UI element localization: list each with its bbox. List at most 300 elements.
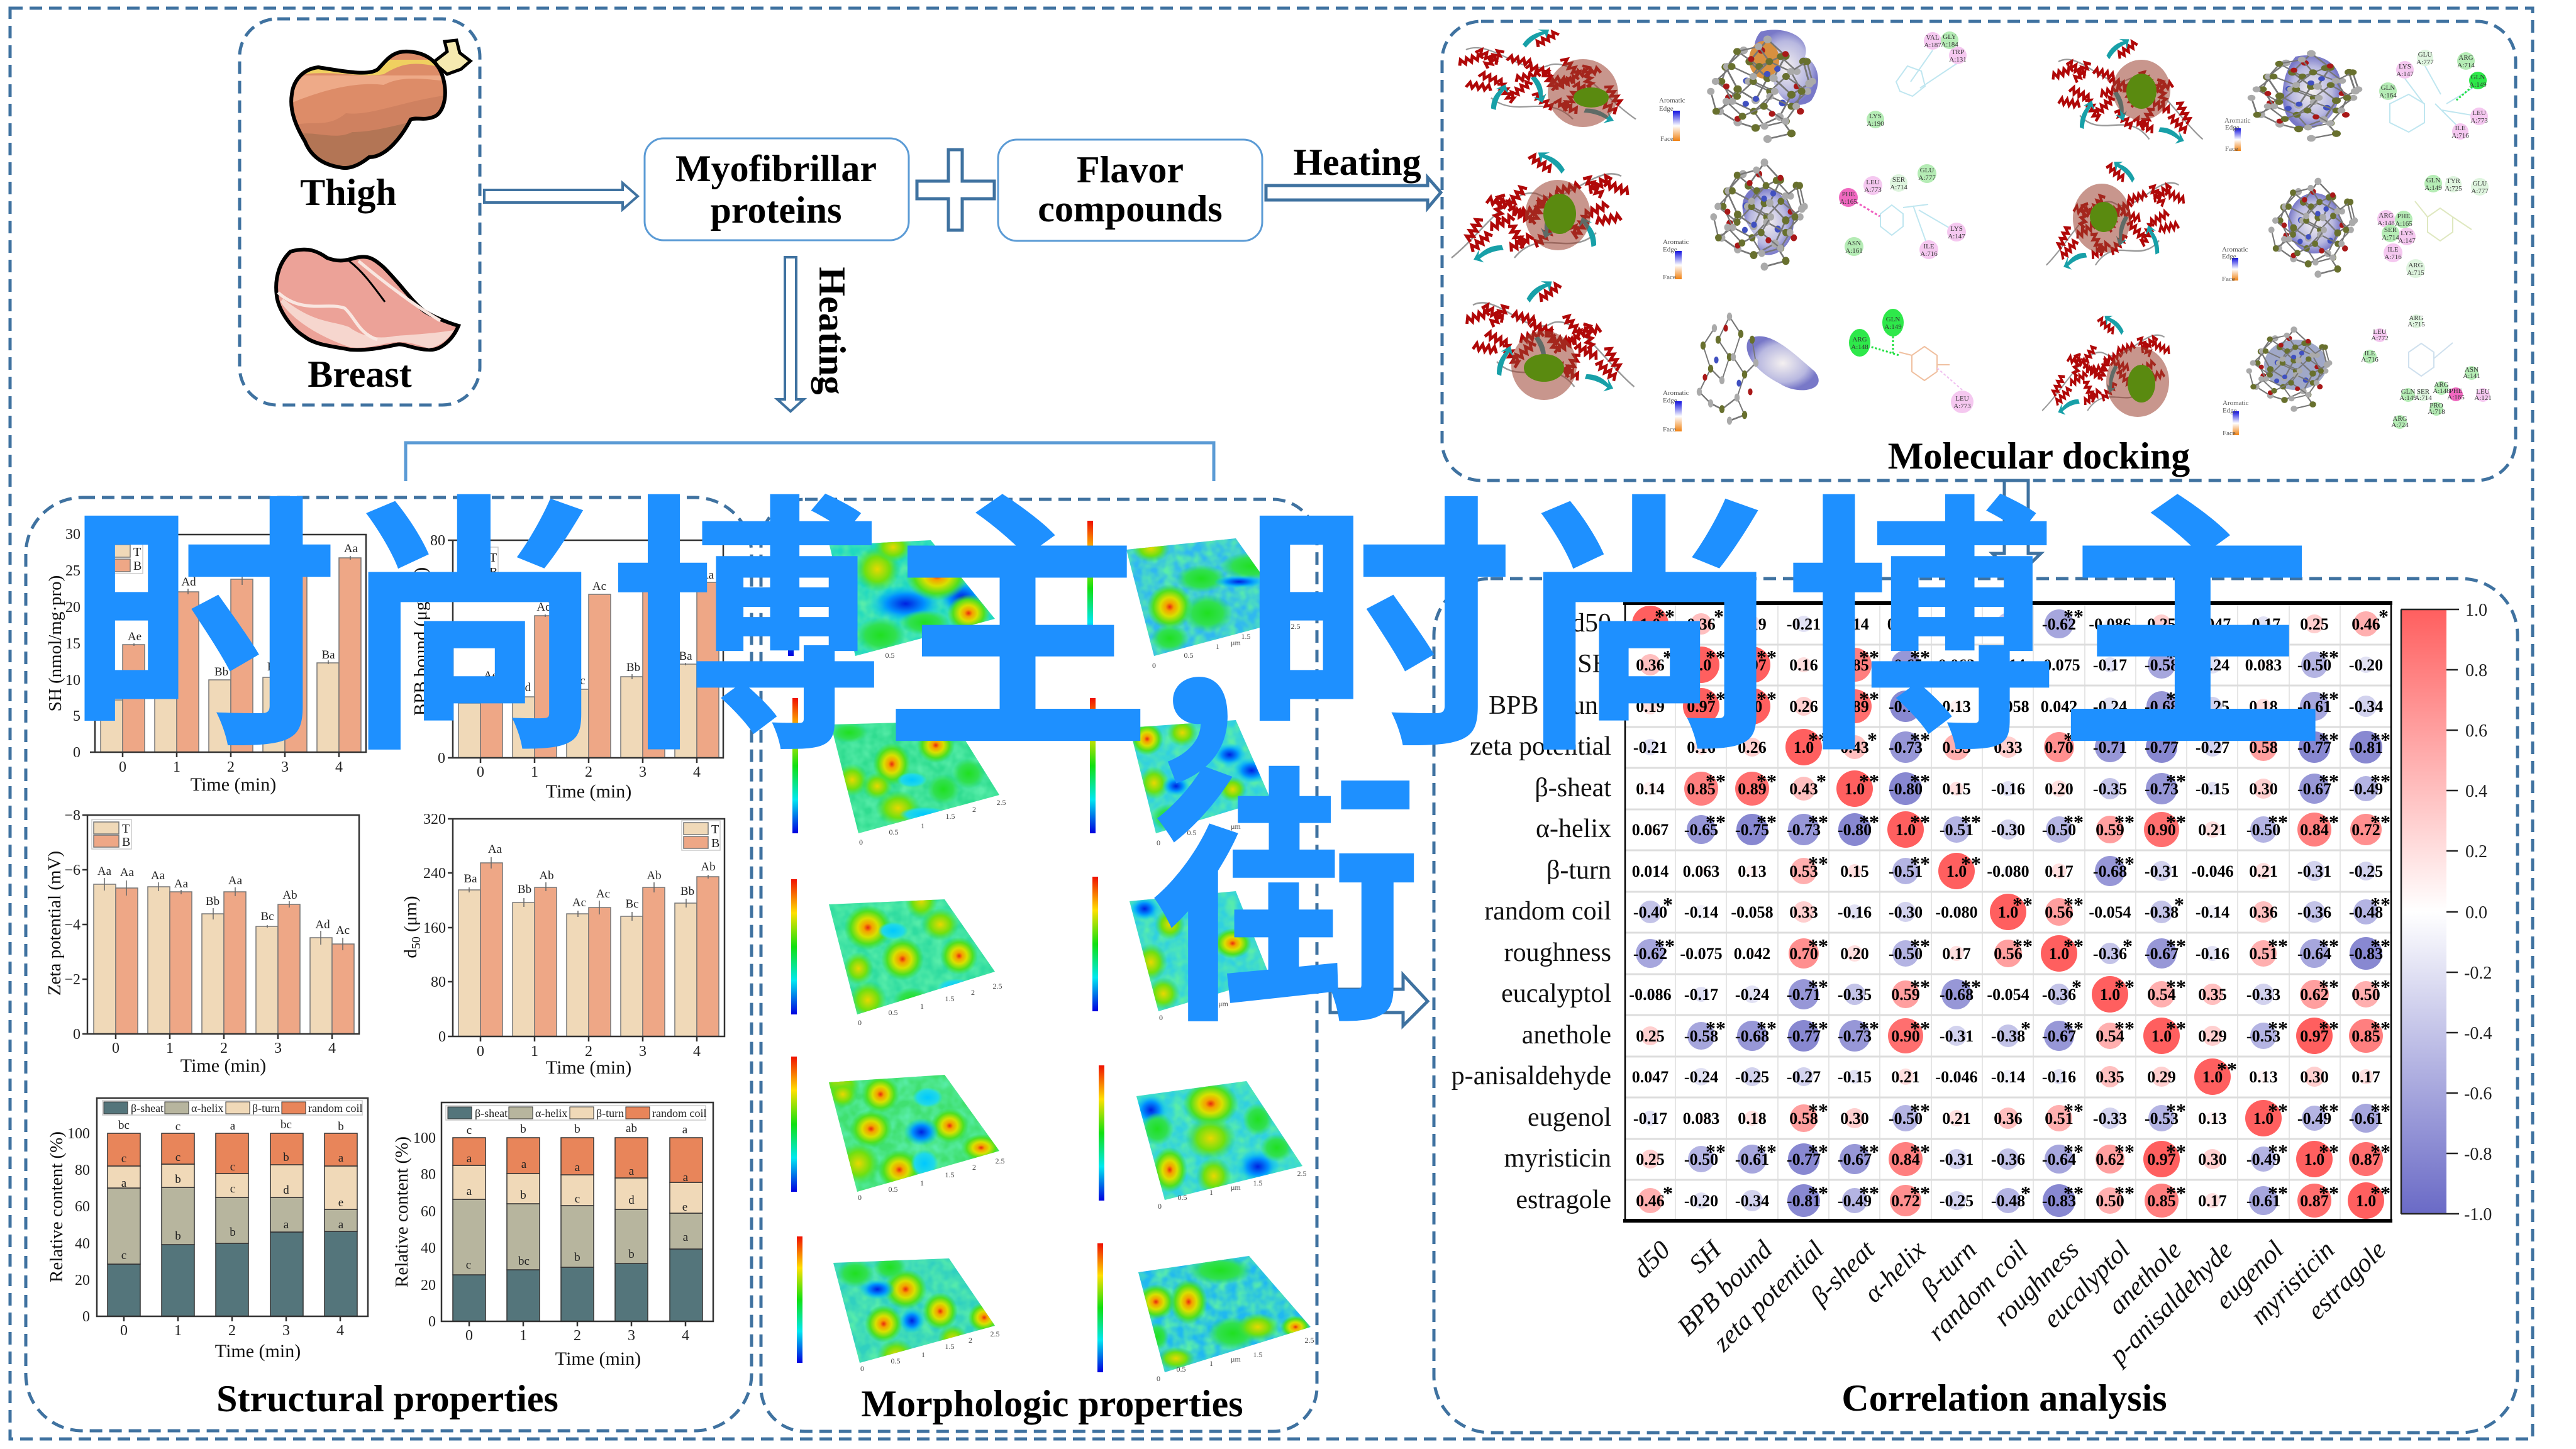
row: anethole: 1.0 <box>2151 1027 2172 1045</box>
row: beta-sheat: 0.20 <box>2045 780 2074 798</box>
AFM surface row 5 left: 2.5 <box>990 1330 1000 1338</box>
chart: d50: 0 <box>438 1029 446 1045</box>
row: eugenol: ** <box>2319 1099 2339 1122</box>
chart: secondary structure breast: 0 <box>428 1314 436 1330</box>
chart: secondary structure thigh: b <box>230 1226 236 1239</box>
2D interaction diagrams: A:716 <box>2361 356 2379 364</box>
row: SH: ** <box>1706 646 1726 669</box>
chart: d50: Bb <box>680 885 694 898</box>
AFM surface row 1 left <box>830 540 995 658</box>
row: eucalyptol: -0.086 <box>1629 985 1672 1004</box>
2D interaction diagrams: A:714 <box>2414 394 2432 402</box>
row: SH: * <box>1663 646 1673 669</box>
chart: secondary structure breast: c <box>466 1258 471 1272</box>
2D interaction diagrams: A:147 <box>1948 233 1965 240</box>
2D interaction diagrams: GLN <box>2471 74 2485 81</box>
row: myristicin: -0.64 <box>2042 1150 2076 1169</box>
row: eugenol: ** <box>2370 1099 2390 1122</box>
row: anethole: ** <box>2319 1017 2339 1040</box>
row: beta-sheat: ** <box>1757 770 1777 792</box>
AFM surface row 2 left: 1 <box>921 821 924 830</box>
AFM surface row 1 right: 0.5 <box>1184 651 1194 660</box>
chart: secondary structure breast: 80 <box>421 1167 436 1183</box>
row: eugenol: ** <box>2166 1099 2186 1122</box>
row: p-anisaldehyde: -0.15 <box>1838 1068 1872 1086</box>
chart: secondary structure thigh: 40 <box>75 1236 90 1252</box>
row: roughness: ** <box>2268 935 2288 957</box>
row: d50: 0.46 <box>2351 615 2380 633</box>
chart: secondary structure thigh: e <box>338 1196 343 1209</box>
row: myristicin: ** <box>1808 1140 1828 1163</box>
chart: BPB bound: 2 <box>585 764 592 780</box>
row: zeta potential: -0.81 <box>2349 738 2383 757</box>
aromatic legends: Edge <box>2222 253 2236 260</box>
AFM surface row 5 left <box>833 1255 1001 1373</box>
row: alpha-helix: -0.65 <box>1684 821 1718 839</box>
row: anethole: 0.97 <box>2300 1027 2329 1045</box>
row: random coil: -0.38 <box>2145 903 2179 921</box>
row: myristicin: 0.87 <box>2351 1150 2380 1169</box>
chart: SH: Bd <box>105 682 119 695</box>
chart: d50: 2 <box>585 1043 592 1060</box>
row: zeta potential: 0.43 <box>1840 738 1869 757</box>
row: beta-turn: -0.31 <box>2297 862 2331 880</box>
chart: secondary structure breast: 20 <box>421 1277 436 1294</box>
row: SH: 0.97 <box>1738 656 1767 674</box>
row: beta-sheat <box>1636 770 2390 807</box>
row: roughness: 0.70 <box>1789 945 1818 963</box>
chart: d50 <box>401 811 724 1078</box>
row: estragole: 0.85 <box>2147 1192 2176 1210</box>
chart: zeta potential: −2 <box>64 972 80 988</box>
2D interaction diagrams: ILE <box>2364 350 2375 357</box>
row: roughness: ** <box>2063 935 2084 957</box>
2D interaction diagrams: GLU <box>2473 180 2487 187</box>
row: myristicin: -0.50 <box>1684 1150 1718 1169</box>
row: eucalyptol: 0.59 <box>1891 985 1920 1004</box>
row: anethole: -0.53 <box>2246 1027 2280 1045</box>
chart: secondary structure breast: b <box>628 1248 635 1261</box>
chart: secondary structure breast: b <box>520 1123 526 1136</box>
arrow with heating label to molecular docking: Heating <box>1293 142 1421 183</box>
row: beta-sheat: 0.30 <box>2249 780 2278 798</box>
row: estragole: -0.83 <box>2042 1192 2076 1210</box>
chart: zeta potential: 2 <box>220 1040 228 1057</box>
row: estragole: 0.17 <box>2198 1192 2227 1210</box>
chart: zeta potential: Time (min) <box>180 1055 266 1076</box>
row: SH: 1.0 <box>1691 656 1711 674</box>
row: anethole: 0.54 <box>2096 1027 2124 1045</box>
row: myristicin: ** <box>2268 1140 2288 1163</box>
row: myristicin: -0.36 <box>1991 1150 2025 1169</box>
row: p-anisaldehyde: 1.0 <box>2202 1068 2223 1086</box>
2D interaction diagrams: PRO <box>2429 402 2443 409</box>
chart: secondary structure breast: 3 <box>628 1328 635 1344</box>
chart: zeta potential: Aa <box>97 865 112 878</box>
arrow: morphology to correlation <box>1330 975 1428 1026</box>
row: eugenol: ** <box>2268 1099 2288 1122</box>
row: estragole: * <box>1663 1182 1673 1204</box>
chart: secondary structure thigh: bc <box>118 1119 130 1132</box>
chart: SH: Bb <box>214 665 228 679</box>
2D interaction diagrams: A:772 <box>2371 335 2389 342</box>
AFM surface row 4 left: 0.5 <box>888 1185 898 1194</box>
chart: SH: Aa <box>344 542 358 555</box>
chart: secondary structure breast: 0 <box>465 1328 473 1344</box>
AFM surface row 5 right: 0 <box>1157 1374 1160 1383</box>
chart: d50: Aa <box>488 843 502 856</box>
row: eucalyptol: -0.35 <box>1838 985 1872 1004</box>
row: random coil: -0.080 <box>1935 903 1978 921</box>
row: roughness: -0.36 <box>2093 945 2127 963</box>
row: eugenol: -0.61 <box>2349 1109 2383 1128</box>
row: beta-sheat: ** <box>1706 770 1726 792</box>
2D interaction diagrams: GLU <box>1920 167 1934 174</box>
colour scale: 0.2 <box>2465 842 2487 862</box>
colour scale <box>2401 601 2492 1224</box>
row: p-anisaldehyde: 0.21 <box>1891 1068 1920 1086</box>
row: BPB bound: -0.25 <box>2196 697 2229 716</box>
row: eucalyptol: ** <box>2166 975 2186 998</box>
row: d50: 0.067 <box>1887 615 1924 633</box>
chart: secondary structure breast: a <box>629 1165 635 1178</box>
arrow with heating label to molecular docking <box>1266 142 1441 208</box>
overlay: large blue watermark text: 街 <box>1151 682 1423 1075</box>
2D interaction diagrams: A:773 <box>1864 186 1882 194</box>
column labels: eugenol <box>2210 1236 2289 1315</box>
row: d50: 0.014 <box>1938 615 1975 633</box>
label: Correlation analysis: Correlation analysis <box>1841 1377 2167 1419</box>
row: p-anisaldehyde: 0.30 <box>2300 1068 2329 1086</box>
2D interaction diagrams: A:716 <box>1920 250 1938 258</box>
chart: d50: 320 <box>423 811 446 828</box>
row: anethole: ** <box>2114 1017 2135 1040</box>
row: zeta potential: 0.26 <box>1738 738 1767 757</box>
row: zeta potential: * <box>1867 728 1877 751</box>
AFM surface row 4 right <box>1133 1081 1307 1211</box>
row: alpha-helix: -0.50 <box>2042 821 2076 839</box>
2D interaction diagrams: SER <box>2384 226 2397 234</box>
2D interaction diagrams: LYS <box>2399 63 2411 70</box>
chart: zeta potential: T <box>122 822 130 836</box>
row: d50: * <box>1714 605 1724 628</box>
chart: zeta potential: 0 <box>112 1040 119 1057</box>
aromatic legends: Edge <box>1659 105 1674 113</box>
row: random coil: 0.56 <box>2045 903 2074 921</box>
row: roughness: 0.51 <box>2249 945 2278 963</box>
row: d50: -0.62 <box>2042 615 2076 633</box>
chart: secondary structure thigh: c <box>175 1120 180 1133</box>
row: zeta potential: -0.77 <box>2145 738 2179 757</box>
chart: secondary structure thigh: c <box>230 1182 235 1196</box>
row: zeta potential: 0.58 <box>2249 738 2278 757</box>
AFM surface row 5 right: μm <box>1231 1355 1241 1363</box>
row: p-anisaldehyde: 0.35 <box>2096 1068 2124 1086</box>
aromatic legends: Aromatic <box>2222 246 2248 253</box>
row labels <box>1452 609 1611 1214</box>
chart: secondary structure thigh: α-helix <box>191 1102 223 1114</box>
2D interaction diagrams: GLN <box>2426 177 2440 184</box>
column labels: roughness <box>1989 1236 2085 1332</box>
row labels: eucalyptol <box>1501 979 1611 1008</box>
2D interaction diagrams: A:147 <box>2398 237 2416 245</box>
row: eugenol: 0.51 <box>2045 1109 2074 1128</box>
row: d50: 1.0 <box>1640 615 1660 633</box>
row: BPB bound: ** <box>1757 687 1777 710</box>
chart: secondary structure thigh: b <box>175 1173 181 1186</box>
aromatic legends: Face <box>2225 145 2238 153</box>
AFM surface row 4 left: 1.5 <box>945 1170 955 1179</box>
row: BPB bound <box>1636 687 2383 724</box>
row: eugenol: 0.21 <box>1942 1109 1971 1128</box>
chart: secondary structure breast: a <box>467 1185 472 1198</box>
row: myristicin: ** <box>2166 1140 2186 1163</box>
chart: secondary structure thigh: d <box>283 1184 289 1197</box>
row: random coil: -0.40 <box>1633 903 1667 921</box>
column labels: β-turn <box>1915 1236 1982 1303</box>
chart: BPB bound: Ab <box>647 572 662 585</box>
chart: zeta potential: Aa <box>174 877 189 891</box>
chart: zeta potential: Aa <box>151 869 165 882</box>
chart: BPB bound: Ae <box>484 669 497 682</box>
2D interaction diagrams: PHE <box>2450 387 2463 395</box>
AFM surface row 5 left: 2 <box>969 1336 972 1345</box>
row: myristicin: -0.61 <box>1735 1150 1769 1169</box>
row: beta-turn: -0.68 <box>2093 862 2127 880</box>
row: SH: -0.17 <box>2093 656 2127 674</box>
2D interaction diagrams: A:724 <box>2391 421 2409 429</box>
arrow with vertical heating label: Heating <box>811 267 853 395</box>
chart: SH: 20 <box>65 599 80 616</box>
AFM surface row 4 left: 2 <box>972 1163 976 1172</box>
2D interaction diagrams: TYR <box>2446 177 2461 185</box>
AFM surface row 5 left: 1.5 <box>945 1342 955 1351</box>
row: beta-turn: -0.51 <box>1889 862 1923 880</box>
row: zeta potential: ** <box>2114 728 2135 751</box>
chart: zeta potential: Aa <box>228 874 243 887</box>
row: anethole: ** <box>1910 1017 1930 1040</box>
chart: secondary structure breast: α-helix <box>535 1107 567 1119</box>
row: beta-turn: 0.53 <box>1789 862 1818 880</box>
row: beta-turn: ** <box>2114 852 2135 875</box>
row: d50: * <box>2021 605 2031 628</box>
row: anethole: -0.58 <box>1684 1027 1718 1045</box>
chart: secondary structure thigh: a <box>338 1152 344 1165</box>
row: BPB bound: -0.61 <box>2297 697 2331 716</box>
label: Thigh: Thigh <box>300 172 397 213</box>
row: myristicin: -0.49 <box>2246 1150 2280 1169</box>
row: estragole: ** <box>2166 1182 2186 1204</box>
row: beta-turn: 0.063 <box>1683 862 1719 880</box>
row: p-anisaldehyde: 0.29 <box>2147 1068 2176 1086</box>
chart: secondary structure thigh: β-turn <box>252 1102 280 1114</box>
row: zeta potential: -0.71 <box>2093 738 2127 757</box>
arrow: docking to correlation <box>1992 480 2041 577</box>
row: alpha-helix: -0.80 <box>1838 821 1872 839</box>
row: eucalyptol: ** <box>2114 975 2135 998</box>
row labels: eugenol <box>1528 1103 1611 1132</box>
chart: BPB bound: 4 <box>693 764 701 780</box>
2D interaction diagrams: LEU <box>2373 328 2387 336</box>
row: myristicin: 0.30 <box>2198 1150 2227 1169</box>
chart: SH: 3 <box>281 759 289 775</box>
row: zeta potential: ** <box>2063 728 2084 751</box>
2D interaction diagrams: GLN <box>2381 84 2395 92</box>
chart: d50: Ac <box>572 896 586 909</box>
row: anethole: -0.77 <box>1787 1027 1821 1045</box>
chart: SH: B <box>133 559 142 573</box>
row: alpha-helix: ** <box>2319 811 2339 833</box>
2D interaction diagrams: ASN <box>2465 366 2479 374</box>
colour scale: -1.0 <box>2464 1205 2492 1224</box>
row: d50: 0.25 <box>2300 615 2329 633</box>
row: random coil: -0.14 <box>1684 903 1718 921</box>
row: eucalyptol: -0.17 <box>1684 985 1718 1004</box>
2D interaction diagrams: LEU <box>2476 388 2490 396</box>
label: Molecular docking: Molecular docking <box>1888 435 2190 477</box>
row: roughness: -0.64 <box>2297 945 2331 963</box>
AFM surface row 3 right: 1 <box>1196 1003 1200 1012</box>
row: BPB bound: -0.75 <box>1889 697 1923 716</box>
2D interaction diagrams: A:714 <box>1890 184 1907 191</box>
chart: SH: 2 <box>227 759 235 775</box>
row: anethole: ** <box>1706 1017 1726 1040</box>
AFM surface row 2 right: μm <box>1231 822 1241 831</box>
row: myristicin: ** <box>2319 1140 2339 1163</box>
row: eucalyptol: -0.68 <box>1940 985 1974 1004</box>
aromatic legends: Aromatic <box>1663 238 1689 246</box>
chart: secondary structure thigh: b <box>175 1230 181 1243</box>
row: eugenol <box>1633 1099 2390 1136</box>
chart: secondary structure breast: a <box>683 1171 689 1184</box>
overlay: large blue watermark text: 时尚博主,时尚博主 <box>67 411 2328 804</box>
row: zeta potential: ** <box>2166 728 2186 751</box>
panel: morphologic properties <box>761 499 1317 1431</box>
row: beta-sheat: -0.16 <box>1991 780 2025 798</box>
row: anethole: -0.68 <box>1735 1027 1769 1045</box>
AFM surface row 2 left: 0.5 <box>889 828 898 836</box>
chart: secondary structure thigh: c <box>175 1151 180 1164</box>
chart: BPB bound: Bd <box>517 681 531 694</box>
chart: zeta potential: −6 <box>64 862 80 879</box>
row: d50 <box>1632 605 2389 642</box>
chart: BPB bound: Ba <box>679 650 692 663</box>
row: estragole: -0.48 <box>1991 1192 2025 1210</box>
2D interaction diagrams: A:165 <box>2395 220 2412 228</box>
box: Myofibrillar proteins: proteins <box>711 189 841 231</box>
colour scale: 0.6 <box>2465 721 2487 741</box>
2D interaction diagrams: PHE <box>2397 213 2411 220</box>
row: estragole: ** <box>1859 1182 1879 1204</box>
AFM surface row 3 left: 1 <box>920 1002 924 1011</box>
row: random coil: * <box>1663 893 1673 916</box>
box: Myofibrillar proteins <box>645 138 909 240</box>
row: eucalyptol: -0.33 <box>2246 985 2280 1004</box>
chart: BPB bound: 1 <box>531 764 538 780</box>
AFM surface row 2 left: 2.5 <box>996 798 1006 807</box>
AFM surface row 4 left: 2.5 <box>995 1157 1005 1165</box>
row: estragole: ** <box>2063 1182 2084 1204</box>
AFM surface row 5 left: 0.5 <box>891 1357 901 1365</box>
chart: secondary structure thigh: Time (min) <box>215 1341 301 1362</box>
chart: d50: (μm) <box>401 896 421 936</box>
2D interaction diagrams: A:165 <box>1840 198 1857 206</box>
chart: secondary structure breast: ab <box>626 1122 637 1135</box>
row: myristicin: 1.0 <box>2304 1150 2324 1169</box>
chart: SH: 30 <box>65 526 80 543</box>
row: eucalyptol: 1.0 <box>2100 985 2120 1004</box>
row: beta-sheat: 0.89 <box>1738 780 1767 798</box>
row: roughness: ** <box>2319 935 2339 957</box>
row: beta-sheat: -0.35 <box>2093 780 2127 798</box>
chart: SH: Bc <box>160 669 174 682</box>
row: zeta potential: 0.33 <box>1994 738 2023 757</box>
row labels: SH <box>1577 650 1611 679</box>
AFM surface row 2 left: 2 <box>972 805 976 814</box>
row: beta-sheat: 0.14 <box>1636 780 1665 798</box>
chart: secondary structure breast: c <box>467 1124 472 1137</box>
row: eugenol: 0.36 <box>1994 1109 2023 1128</box>
AFM surface row 5 left: 0 <box>860 1364 864 1373</box>
row: SH: ** <box>1757 646 1777 669</box>
chart: SH: Ad <box>181 575 196 589</box>
chart: secondary structure thigh: 0 <box>120 1323 128 1339</box>
AFM surface row 1 left: μm <box>951 635 962 643</box>
chart: d50: Bb <box>518 883 531 896</box>
chart: secondary structure thigh: a <box>121 1177 127 1190</box>
row: SH: 0.083 <box>2245 656 2282 674</box>
row: random coil: -0.054 <box>2089 903 2131 921</box>
row: roughness <box>1633 935 2390 972</box>
AFM surface row 4 left: 1 <box>920 1179 924 1187</box>
row: zeta potential: ** <box>2370 728 2390 751</box>
row: estragole: -0.61 <box>2246 1192 2280 1210</box>
row: roughness: ** <box>1808 935 1828 957</box>
row labels: roughness <box>1504 938 1611 967</box>
2D interaction diagrams: A:161 <box>1845 247 1863 255</box>
row: beta-turn: 0.014 <box>1632 862 1668 880</box>
chart: BPB bound: 20 <box>430 696 445 712</box>
colour scale: 0.4 <box>2465 782 2487 801</box>
2D interaction diagrams: TRP <box>1951 48 1964 56</box>
row labels: zeta potential <box>1470 732 1611 761</box>
row: p-anisaldehyde: 0.13 <box>2249 1068 2278 1086</box>
row: beta-sheat: ** <box>1910 770 1930 792</box>
row: zeta potential: -0.77 <box>2297 738 2331 757</box>
row: beta-sheat: ** <box>2166 770 2186 792</box>
row: alpha-helix: -0.30 <box>1991 821 2025 839</box>
row: beta-sheat: -0.15 <box>2196 780 2229 798</box>
aromatic legends: Aromatic <box>1663 389 1689 397</box>
row: p-anisaldehyde: -0.046 <box>1935 1068 1978 1086</box>
row: beta-sheat: 0.43 <box>1789 780 1818 798</box>
2D interaction diagrams: ARG <box>2434 381 2449 389</box>
chart: zeta potential: Ab <box>282 889 297 902</box>
row: random coil: 1.0 <box>1998 903 2018 921</box>
row: SH: -0.24 <box>2196 656 2229 674</box>
chart: secondary structure thigh: β-sheat <box>131 1102 164 1114</box>
2D interaction diagrams: A:190 <box>1867 120 1884 128</box>
row: roughness: ** <box>2370 935 2390 957</box>
row: BPB bound: ** <box>2166 687 2186 710</box>
column labels: eucalyptol <box>2038 1236 2136 1334</box>
row labels: β-sheat <box>1535 774 1611 802</box>
row: beta-sheat: ** <box>2319 770 2339 792</box>
aromatic legends: Face <box>2223 430 2236 437</box>
2D interaction diagrams: GLY <box>1943 33 1957 41</box>
row: zeta potential: ** <box>2268 728 2288 751</box>
icon: plus sign <box>917 150 994 230</box>
